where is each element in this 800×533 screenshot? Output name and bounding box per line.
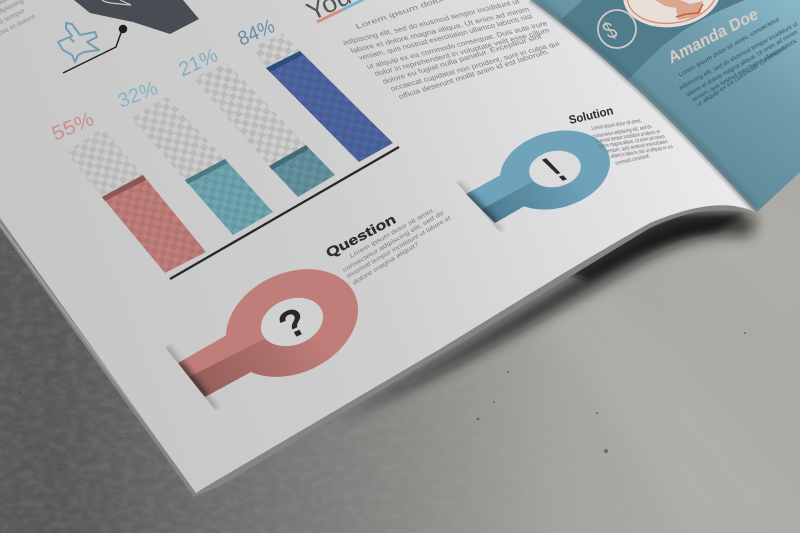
bar 84%: 84%: [235, 15, 278, 51]
body text: officia deserunt mollit anim id est laborum.: [397, 48, 551, 101]
icon: question keyhole: [178, 269, 358, 397]
icon: dark hand: [74, 0, 199, 34]
solution text: [591, 117, 674, 166]
solution heading: Solution: [567, 104, 615, 126]
question text: dolore magna aliqua?: [352, 241, 420, 287]
icon: exclamation keyhole: [466, 130, 610, 223]
bar 55%: [49, 108, 206, 273]
solution text: veniam, quis nostrud exercitation: [605, 138, 669, 154]
body text: dolore eu fugiat nulla pariatur. Excepteur sint: [381, 33, 543, 86]
portrait figure: [655, 0, 703, 20]
solution text: dolore magna aliqua. Ut enim ad minim: [598, 133, 665, 149]
soft shadow on paper at stem end: [165, 347, 215, 410]
staples: [615, 78, 639, 100]
dark blue band: [557, 0, 745, 81]
body text: [341, 0, 561, 101]
bar chart: [49, 15, 399, 279]
profile text: Lorem ipsum dolor sit amet, consectetur: [678, 16, 782, 79]
solution text: eiusmod tempor incididunt ut labore et: [595, 128, 661, 144]
question text: consectetur adipiscing elit, sed do: [342, 210, 445, 274]
icon: dollar circle: [597, 10, 636, 48]
top left text fragment: [0, 0, 37, 38]
page stack edge: [0, 190, 757, 497]
chart baseline: [170, 147, 399, 279]
blue right page: [525, 0, 800, 212]
body text: dolor in reprehenderit in voluptate velit esse cillum: [373, 27, 551, 78]
question heading: Question: [323, 211, 399, 261]
solution text: ullamco laboris nisi ut aliquip ex ea: [610, 143, 674, 159]
question text: Lorem ipsum dolor sit amet,: [349, 206, 436, 260]
gutter shading: [530, 0, 755, 212]
question block: [165, 206, 452, 410]
solution text: consectetur adipiscing elit, sed do: [592, 123, 653, 139]
bar 55%: 55%: [49, 108, 97, 146]
pin line: [63, 25, 127, 73]
body text: occaecat cupidatat non proident, sunt in culpa qui: [389, 40, 561, 93]
icon: exclamation keyhole: !: [533, 152, 577, 189]
icon: dollar circle: $: [597, 17, 623, 44]
icon: pointing hand outline: [58, 23, 99, 62]
spine shadow: [535, 0, 755, 208]
portrait circle: [619, 0, 725, 33]
bar 21%: [176, 44, 335, 197]
bar 84%: [235, 15, 393, 162]
darker lower fold: [189, 340, 314, 397]
solution text: commodo consequat.: [615, 152, 650, 166]
bar 21%: 21%: [176, 44, 221, 82]
stem end shadow: [466, 194, 495, 223]
icon: question keyhole: ?: [270, 299, 316, 348]
solution text: Lorem ipsum dolor sit amet,: [591, 117, 642, 131]
profile text: ut aliquip ex ea commodo consequat.: [696, 44, 788, 109]
shadow under brochure: [330, 213, 756, 425]
name: Amanda Doe: Amanda Doe: [666, 5, 760, 68]
soft shadow on paper at stem end: [456, 182, 500, 232]
stem end shadow: [178, 363, 205, 397]
heading underline: [317, 0, 372, 22]
darker lower fold: [481, 182, 573, 223]
bar 32%: [115, 77, 273, 235]
floor specks: [19, 332, 746, 471]
question text: eiusmod tempor incididunt ut labore et: [346, 215, 452, 280]
solution block: [456, 104, 674, 232]
bar 32%: 32%: [115, 77, 161, 113]
